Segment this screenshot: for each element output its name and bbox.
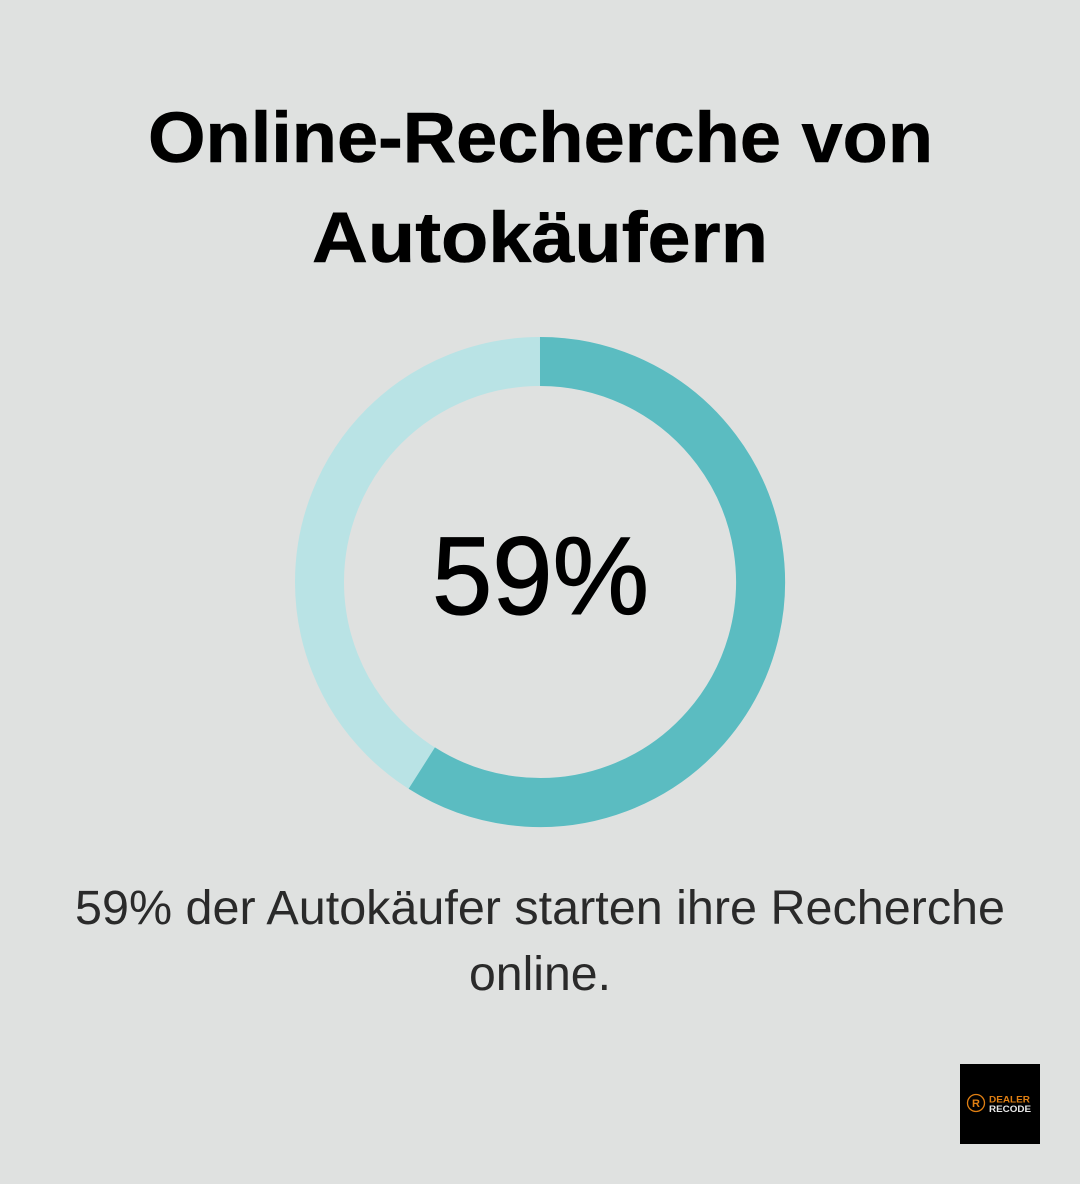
title: Autokäufern xyxy=(312,199,768,278)
donut value: 59% xyxy=(432,515,649,638)
logo wordmark: RECODE xyxy=(989,1104,1031,1115)
logo wordmark xyxy=(989,1094,1031,1115)
description: 59% der Autokäufer starten ihre Recherche xyxy=(75,882,1005,935)
donut chart xyxy=(320,362,761,802)
icon: logo mark: R xyxy=(972,1098,980,1110)
logo wordmark: DEALER xyxy=(989,1094,1030,1106)
title: Online-Recherche von xyxy=(148,99,933,178)
description: online. xyxy=(469,948,611,1001)
title xyxy=(148,99,933,278)
logo xyxy=(960,1064,1040,1144)
description xyxy=(75,882,1005,1001)
